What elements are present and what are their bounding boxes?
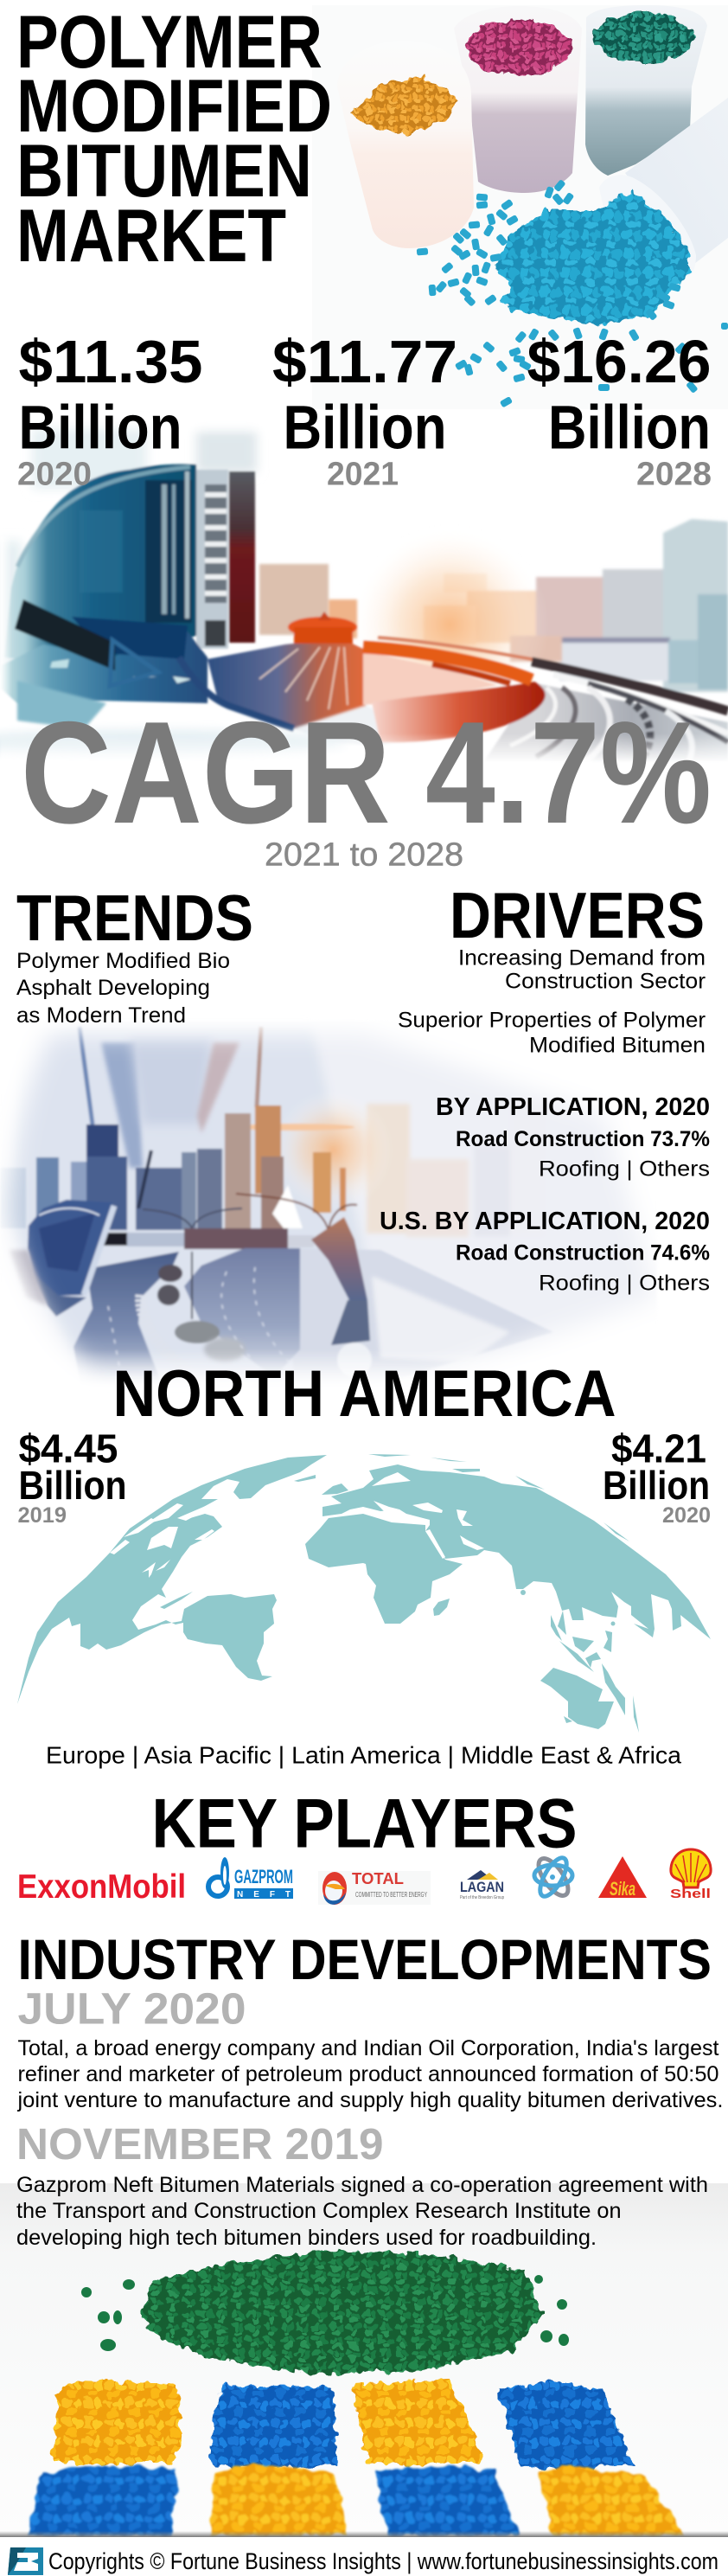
market value 2020: Billion — [19, 394, 182, 462]
development: July 2020: Total, a broad energy company and Indian Oil Corporation, India's largest — [17, 2036, 719, 2060]
logo: Lagan: Part of the Breedon Group — [460, 1895, 504, 1900]
North America value 2019: $4.45 — [19, 1426, 118, 1471]
edge fades — [0, 734, 728, 763]
by application 2020 — [436, 1093, 710, 1182]
right road — [184, 1248, 300, 1377]
development: November 2019: Gazprom Neft Bitumen Materials signed a co-operation agreement with — [16, 2173, 708, 2197]
white shirt gap — [272, 1185, 303, 1228]
North America heading: NORTH AMERICA — [112, 1357, 616, 1431]
red domed station — [288, 612, 357, 644]
greenland arctic islands east — [294, 1475, 316, 1482]
icon: Fortune Business Insights logo — [8, 2547, 43, 2575]
by application 2020: Roofing | Others — [539, 1157, 710, 1182]
logo: Shell — [670, 1849, 711, 1901]
market value 2020: 2020 — [17, 457, 92, 493]
helmet strap — [110, 640, 158, 686]
left road — [73, 1252, 179, 1384]
drivers panel: Modified Bitumen — [529, 1033, 706, 1057]
madagascar — [433, 1599, 450, 1616]
North America value 2020 — [603, 1426, 711, 1528]
by application 2020: Road Construction 73.7% — [456, 1127, 710, 1151]
regions list: Europe | Asia Pacific | Latin America | Middle East & Africa — [46, 1742, 681, 1768]
logo: Total: TOTAL — [352, 1870, 404, 1887]
rail viaduct — [363, 638, 728, 770]
beige building — [259, 564, 329, 635]
title: MARKET — [16, 195, 286, 278]
North America value 2020: Billion — [603, 1463, 710, 1508]
canadian bays and lakes — [110, 1503, 214, 1578]
stray green pellets — [81, 2275, 569, 2351]
development: November 2019: developing high tech bitumen binders used for roadbuilding. — [16, 2226, 597, 2250]
glove and hand — [331, 1300, 372, 1377]
straps — [80, 1027, 93, 1125]
collar and shirt shading — [101, 1042, 143, 1168]
title: BITUMEN — [16, 130, 312, 213]
bottom fade — [0, 1349, 728, 1393]
africa — [305, 1514, 463, 1624]
pale ground inside curve — [363, 650, 497, 705]
lane markings — [105, 1266, 283, 1365]
horizon bars — [98, 1228, 314, 1249]
U.S. by application 2020: U.S. BY APPLICATION, 2020 — [380, 1208, 710, 1235]
market value 2028 — [527, 328, 712, 493]
lower helmet shell — [0, 627, 208, 703]
orange glow — [350, 525, 549, 724]
trends panel: Polymer Modified Bio — [16, 949, 230, 973]
glass facade — [80, 471, 192, 623]
lens glow — [289, 1105, 370, 1195]
footer — [8, 2547, 718, 2575]
image: helmet and city railway montage — [0, 415, 728, 789]
logo: atom emblem — [533, 1854, 573, 1900]
market value 2020: $11.35 — [19, 328, 202, 395]
logo: Gazprom Neft: GAZPROM — [234, 1866, 293, 1887]
helmet dome — [4, 465, 196, 666]
North America value 2020: $4.21 — [611, 1426, 706, 1471]
stray blue pellets — [417, 179, 728, 407]
Key players heading: KEY PLAYERS — [152, 1785, 578, 1863]
drivers panel — [398, 879, 706, 1057]
market value 2021 — [272, 328, 457, 493]
light tower — [196, 470, 228, 649]
shadow at image base — [0, 2531, 728, 2537]
North America value 2019: 2019 — [17, 1503, 67, 1528]
logo: Lagan — [460, 1870, 504, 1900]
trends panel: as Modern Trend — [16, 1003, 186, 1028]
bottom row tiles — [28, 2465, 176, 2536]
image: coloured polymer pellets in jars — [312, 5, 728, 409]
drivers panel: Superior Properties of Polymer — [398, 1009, 706, 1033]
image: engineer with city and road overlay — [0, 1026, 652, 1379]
green pile — [139, 2251, 543, 2374]
peach distant city — [424, 574, 540, 644]
red tower — [229, 471, 255, 643]
logo: Sika: Sika — [610, 1878, 635, 1900]
southeast asia islands — [551, 1615, 562, 1641]
americas — [17, 1455, 327, 1704]
pale haze behind dome — [0, 424, 257, 670]
trends panel: TRENDS — [16, 881, 253, 954]
development: November 2019: NOVEMBER 2019 — [16, 2119, 383, 2169]
logo: Gazprom Neft — [208, 1857, 293, 1900]
logo: Total — [318, 1870, 431, 1905]
blue pellet pile — [495, 190, 689, 326]
uk and ireland — [322, 1483, 348, 1495]
dark brim edge — [179, 657, 294, 728]
trends panel — [16, 881, 253, 1028]
key player logos — [17, 1849, 711, 1906]
skyline — [0, 1105, 346, 1230]
right arm — [311, 1217, 367, 1302]
helmet band — [15, 599, 115, 670]
toppled jar — [625, 98, 728, 264]
market value 2020 — [17, 328, 202, 493]
market value 2028: $16.26 — [527, 328, 711, 395]
teal pellets — [593, 12, 693, 62]
orange pellets — [350, 76, 461, 134]
drivers panel: Increasing Demand from — [458, 946, 706, 971]
logo: Shell: Shell — [670, 1887, 711, 1901]
top row tiles — [52, 2381, 182, 2465]
road median with trees — [141, 1252, 246, 1380]
rail yard — [208, 638, 367, 735]
held helmet — [28, 1200, 114, 1296]
logo: Lagan: LAGAN — [460, 1879, 504, 1895]
development: July 2020 — [16, 1984, 724, 2112]
development: November 2019: the Transport and Construction Complex Research Institute on — [16, 2199, 621, 2223]
market value 2021: $11.77 — [272, 328, 457, 395]
pink pellets — [465, 20, 571, 75]
market value 2021: 2021 — [327, 457, 399, 493]
market value 2021: Billion — [284, 394, 446, 462]
eurasia — [322, 1464, 711, 1639]
North America value 2019: Billion — [19, 1463, 126, 1508]
white brim tip — [294, 705, 417, 746]
arm under helmet — [26, 1250, 86, 1317]
caribbean islands — [160, 1592, 193, 1609]
title — [16, 1, 332, 278]
australia — [540, 1668, 614, 1729]
sri lanka — [520, 1590, 526, 1595]
U.S. by application 2020: Roofing | Others — [539, 1272, 710, 1296]
title: POLYMER — [16, 1, 322, 84]
development: July 2020: refiner and marketer of petroleum product announced formation of 50:50 — [17, 2062, 719, 2086]
development: July 2020: joint venture to manufacture and supply high quality bitumen derivatives. — [16, 2088, 724, 2112]
lower white-blue glare — [0, 730, 346, 758]
North America value 2019 — [17, 1426, 126, 1528]
world map — [17, 1454, 711, 1733]
north asian islands — [368, 1454, 629, 1541]
far right pale road — [358, 1249, 551, 1370]
U.S. by application 2020 — [380, 1208, 710, 1296]
by application 2020: BY APPLICATION, 2020 — [436, 1093, 710, 1121]
trends panel: Asphalt Developing — [16, 976, 210, 1000]
logo: ExxonMobil: ExxonMobil — [17, 1868, 186, 1906]
title: MODIFIED — [16, 65, 332, 148]
blue brim band — [72, 617, 188, 659]
development: July 2020: JULY 2020 — [17, 1984, 246, 2033]
drivers panel: Construction Sector — [505, 969, 706, 993]
market value 2028: 2028 — [636, 457, 712, 493]
logo: Sika — [598, 1856, 647, 1900]
image: green yellow and blue pellets on white — [0, 2183, 728, 2576]
development: November 2019 — [16, 2119, 708, 2250]
logo: Total: COMMITTED TO BETTER ENERGY — [355, 1891, 427, 1899]
logo: Gazprom Neft: NEFT — [237, 1890, 291, 1900]
right hand buildings — [510, 519, 728, 692]
inland seas — [372, 1472, 484, 1559]
right pale city — [365, 1102, 507, 1237]
CAGR period: 2021 to 2028 — [265, 837, 463, 874]
North America value 2020: 2020 — [662, 1503, 711, 1528]
worker shirt base — [316, 1033, 652, 1355]
U.S. by application 2020: Road Construction 74.6% — [456, 1240, 710, 1265]
lamp posts — [143, 1194, 357, 1231]
